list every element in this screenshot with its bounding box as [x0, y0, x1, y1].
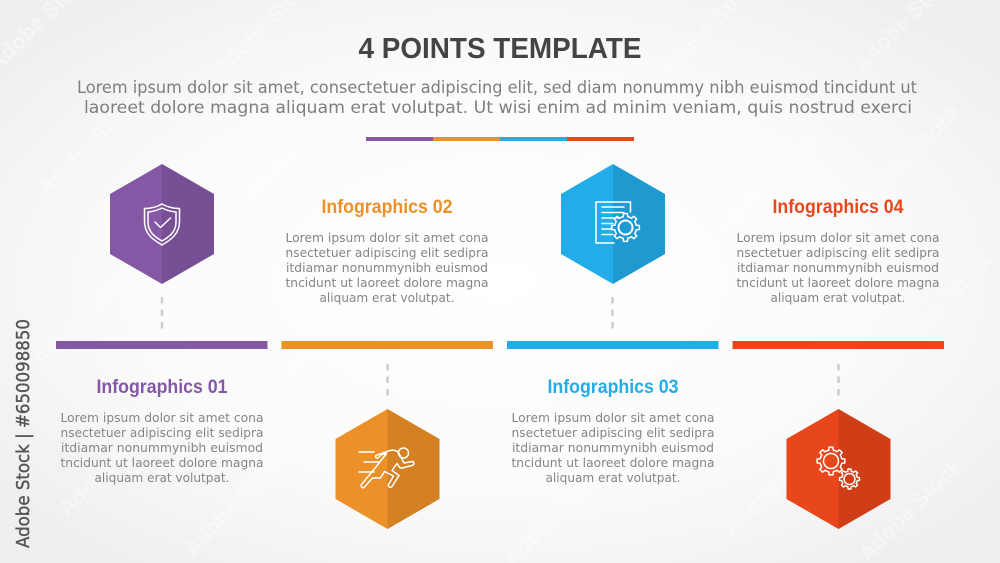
- text block: itdiamar nonummynibh euismod: [286, 261, 488, 275]
- watermark pattern: Adobe Stock: [178, 448, 292, 561]
- watermark pattern: Adobe Stock: [53, 408, 167, 521]
- watermark pattern: Adobe Stock: [853, 453, 967, 563]
- heading: Infographics 03: [548, 377, 678, 398]
- text block: aliquam erat volutpat.: [320, 291, 454, 305]
- text block: nsectetuer adipiscing elit sedipra: [512, 426, 714, 440]
- text block: itdiamar nonummynibh euismod: [512, 441, 714, 455]
- text block: aliquam erat volutpat.: [770, 291, 906, 305]
- watermark pattern: Adobe Stock: [33, 88, 147, 201]
- text block: aliquam erat volutpat.: [94, 471, 230, 485]
- icon: blue hexagon with document and gear: [561, 164, 665, 284]
- text block: [512, 411, 714, 485]
- icon: red hexagon with gears: [786, 409, 890, 529]
- text block: aliquam erat volutpat.: [546, 471, 680, 485]
- connector: [837, 364, 840, 396]
- title colour divider: [366, 137, 634, 141]
- text block: nsectetuer adipiscing elit sedipra: [286, 246, 488, 260]
- text block: Lorem ipsum dolor sit amet cona: [512, 411, 714, 425]
- text block: itdiamar nonummynibh euismod: [61, 441, 263, 455]
- text block: [60, 411, 264, 485]
- watermark pattern: Adobe Stock: [548, 263, 662, 376]
- text block: [736, 231, 940, 305]
- watermark pattern: Adobe Stock: [493, 143, 607, 256]
- text block: [286, 231, 488, 305]
- watermark pattern: Adobe Stock: [238, 93, 352, 206]
- watermark pattern: Adobe Stock: [853, 98, 967, 211]
- connector: [161, 297, 163, 329]
- panel: point 03: [507, 164, 718, 485]
- text block: tncidunt ut laoreet dolore magna: [512, 456, 714, 470]
- title: 4 POINTS TEMPLATE: [358, 33, 642, 65]
- subtitle text: [77, 78, 918, 117]
- heading: Infographics 01: [96, 377, 228, 398]
- text block: tncidunt ut laoreet dolore magna: [736, 276, 940, 290]
- panel: point 01: [56, 164, 268, 485]
- heading: Infographics 04: [772, 197, 904, 218]
- text block: tncidunt ut laoreet dolore magna: [286, 276, 488, 290]
- text block: nsectetuer adipiscing elit sedipra: [736, 246, 940, 260]
- subtitle text: Lorem ipsum dolor sit amet, consectetuer adipiscing elit, sed diam nonummy nibh euismod tincidunt ut: [77, 78, 918, 97]
- text block: nsectetuer adipiscing elit sedipra: [60, 426, 264, 440]
- panel: point 04: [732, 197, 944, 529]
- text block: Lorem ipsum dolor sit amet cona: [736, 231, 940, 245]
- connector: [611, 297, 614, 329]
- connector: [386, 364, 389, 396]
- text block: tncidunt ut laoreet dolore magna: [60, 456, 264, 470]
- watermark pattern: Adobe Stock: [708, 128, 822, 241]
- text block: Lorem ipsum dolor sit amet cona: [60, 411, 264, 425]
- watermark pattern: Adobe Stock: [28, 258, 142, 371]
- subtitle text: laoreet dolore magna aliquam erat volutpat. Ut wisi enim ad minim veniam, quis nostrud exerci: [84, 98, 912, 117]
- vertical stock credit: Adobe Stock | #650098850: [14, 319, 34, 548]
- panel: point 02: [282, 197, 493, 529]
- heading: Infographics 02: [322, 197, 452, 218]
- watermark pattern: Adobe Stock: [883, 248, 997, 361]
- watermark pattern: Adobe Stock: [718, 428, 832, 541]
- icon: purple hexagon with shield: [110, 164, 214, 284]
- bar: [282, 341, 493, 349]
- bar: [732, 341, 944, 349]
- text block: Lorem ipsum dolor sit amet cona: [286, 231, 488, 245]
- bar: [507, 341, 718, 349]
- watermark pattern: Adobe Stock: [278, 268, 392, 381]
- icon: orange hexagon with runner: [336, 409, 440, 529]
- bar: [56, 341, 268, 349]
- text block: itdiamar nonummynibh euismod: [737, 261, 939, 275]
